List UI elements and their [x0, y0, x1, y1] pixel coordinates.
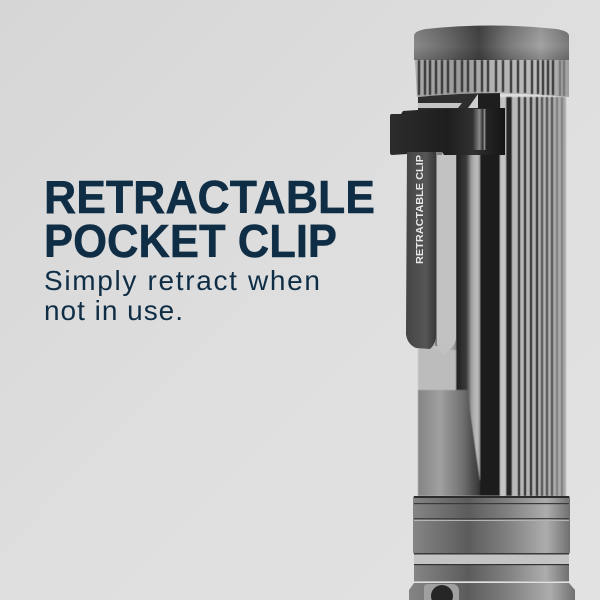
clip arm	[406, 150, 436, 349]
gap under head	[418, 93, 500, 110]
clip light side	[437, 155, 456, 354]
body ribs	[519, 97, 562, 496]
head cap	[414, 26, 569, 60]
flashlight	[390, 26, 575, 600]
knurled ring	[415, 60, 569, 97]
button	[424, 584, 459, 600]
subheading text	[44, 265, 320, 326]
pocket clip	[390, 108, 505, 354]
subheading text: Simply retract when	[44, 265, 320, 296]
clip highlights	[473, 109, 486, 150]
collar	[413, 496, 570, 555]
flashlight body	[418, 97, 566, 497]
clip shadow stripe	[435, 150, 442, 346]
heading	[44, 171, 375, 267]
subheading text: not in use.	[44, 295, 183, 326]
heading: RETRACTABLE	[44, 171, 375, 223]
clip label: RETRACTABLE CLIP	[414, 155, 426, 264]
lower collar	[409, 564, 575, 600]
clip top bracket	[390, 108, 505, 155]
heading: POCKET CLIP	[44, 215, 337, 267]
light ring	[414, 555, 569, 564]
